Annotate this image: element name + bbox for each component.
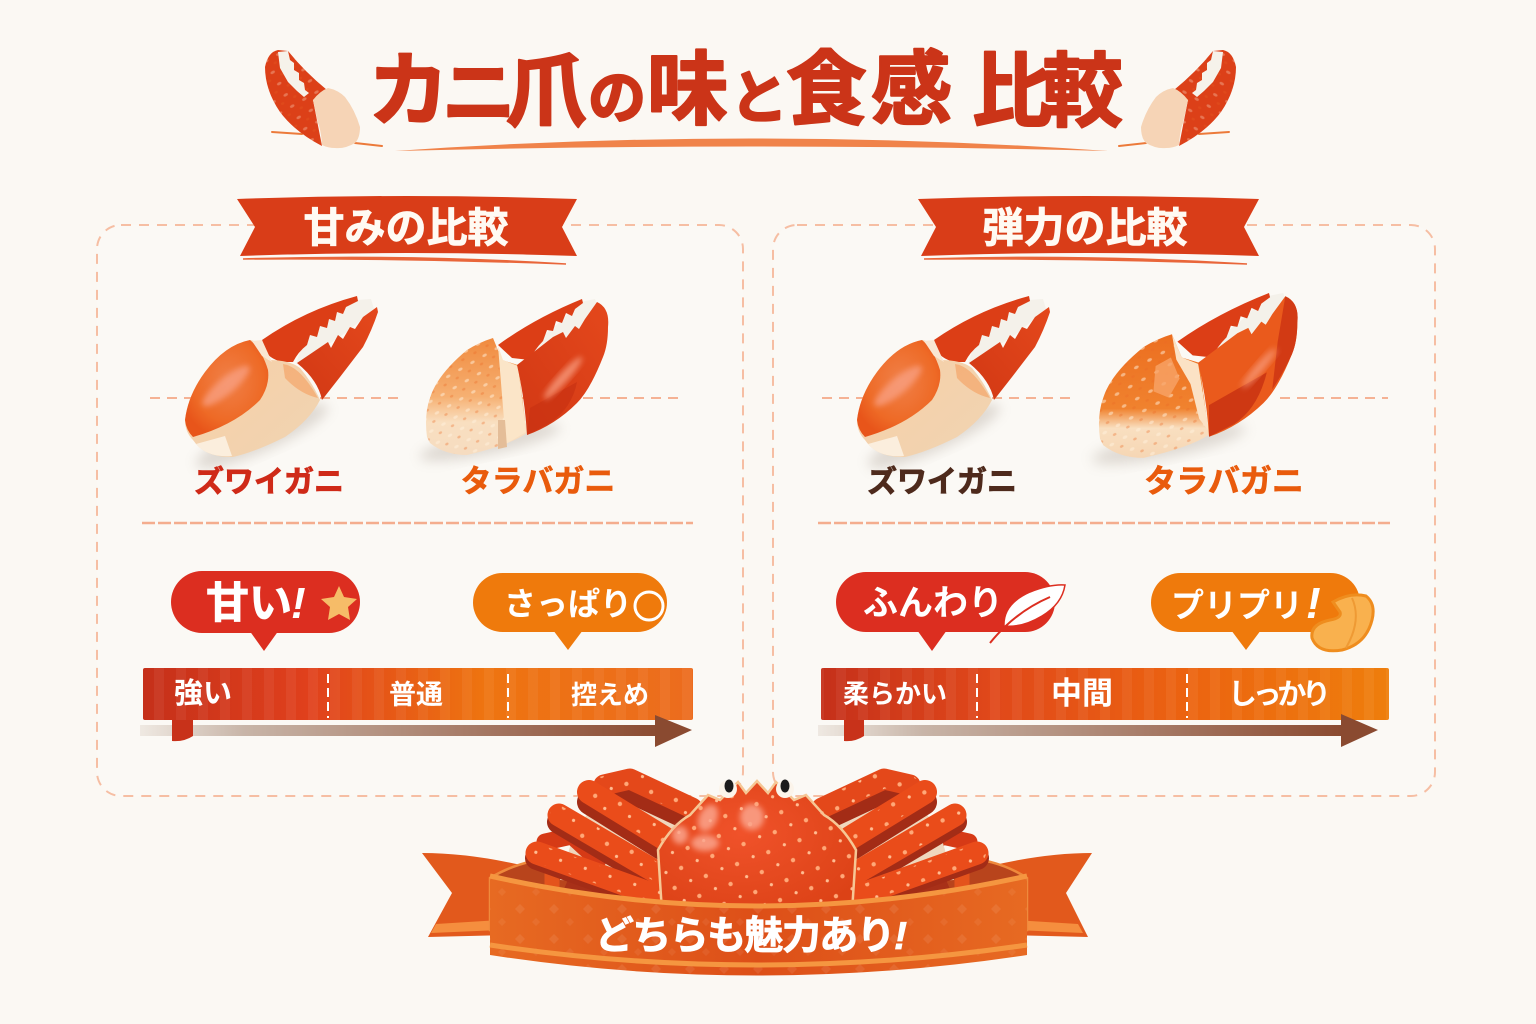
ribbon back — [490, 857, 1027, 930]
title text: ニ — [442, 52, 516, 135]
panel frame — [97, 225, 743, 796]
title text: 比 — [972, 48, 1053, 138]
divider — [818, 522, 1390, 524]
left leg backing — [560, 785, 690, 885]
title text: 食 — [786, 46, 867, 136]
crab shell highlight — [672, 802, 764, 851]
speech bubble: refreshing: さっぱり — [504, 586, 632, 622]
crab shell — [658, 781, 856, 912]
panel: sweetness comparison — [97, 196, 743, 796]
speech bubble: springy: ! — [1306, 579, 1321, 628]
panel frame — [773, 225, 1435, 796]
title text: 味 — [647, 46, 728, 136]
ribbon tail right — [990, 853, 1092, 937]
speech bubble: springy — [1151, 573, 1373, 651]
title text: カ — [368, 47, 449, 137]
claw: snow crab — [185, 296, 378, 479]
crab legs left — [537, 779, 692, 902]
title text: 爪 — [506, 48, 587, 138]
speech bubble: fluffy — [836, 572, 1065, 651]
illustration: red king crab — [537, 779, 977, 912]
scale label: soft: 柔らかい — [843, 679, 947, 709]
guide lines — [150, 397, 682, 399]
panel: elasticity comparison — [773, 196, 1435, 796]
speech bubble: fluffy: ふんわり — [863, 584, 1003, 623]
speech bubble: springy: プリプリ — [1171, 587, 1303, 624]
speech bubble: sweet: ! — [291, 579, 306, 628]
ribbon tail left — [422, 853, 525, 937]
icon: star — [321, 586, 357, 620]
crab eyes — [719, 780, 794, 798]
speech bubble: sweet — [171, 571, 360, 651]
divider — [142, 522, 693, 524]
sweetness scale bar — [143, 668, 693, 720]
heading banner: elasticity — [918, 196, 1259, 264]
conclusion: crab and ribbon — [422, 779, 1092, 976]
claw: snow crab — [857, 296, 1050, 479]
title text: の — [588, 66, 646, 131]
icon: circle — [635, 592, 663, 620]
speech bubble: refreshing — [473, 573, 667, 650]
claw: king crab — [417, 299, 608, 469]
icon: left crab claw — [265, 50, 382, 148]
label: snow crab: ズワイガニ — [867, 465, 1017, 499]
far legs — [545, 836, 969, 905]
guide lines — [822, 397, 1388, 399]
heading banner: sweetness — [237, 196, 577, 264]
label: snow crab: ズワイガニ — [194, 465, 344, 499]
speech bubble: sweet: 甘い — [206, 580, 292, 628]
scale label: mild: 控えめ — [571, 680, 649, 710]
crab legs right — [822, 779, 977, 902]
scale label: firm: しっかり — [1228, 679, 1331, 711]
title text: 感 — [871, 46, 952, 136]
title text: と — [730, 66, 788, 131]
scale label: middle: 中間 — [1051, 676, 1113, 711]
icon: right crab claw — [1119, 50, 1236, 148]
label: king crab: タラバガニ — [461, 464, 615, 499]
ribbon front — [490, 876, 1027, 976]
icon: crab meat — [1312, 595, 1373, 651]
heading banner: sweetness: 甘みの比較 — [304, 205, 508, 251]
scale label: medium: 普通 — [389, 680, 443, 710]
arrow: elasticity direction — [818, 714, 1378, 747]
title — [265, 46, 1236, 151]
scale label: strong: 強い — [174, 677, 232, 710]
heading banner: elasticity: 弾力の比較 — [982, 205, 1188, 251]
arrow: sweetness direction — [140, 715, 692, 747]
elasticity scale bar — [821, 668, 1389, 720]
title text — [368, 46, 1123, 138]
claw: king crab — [1089, 293, 1298, 472]
conclusion text: どちらも魅力あり! — [595, 915, 907, 958]
icon: feather — [990, 585, 1065, 643]
title text: 較 — [1042, 48, 1123, 138]
title underline — [395, 138, 1108, 151]
right leg backing — [824, 785, 954, 885]
label: king crab: タラバガニ — [1144, 463, 1304, 499]
